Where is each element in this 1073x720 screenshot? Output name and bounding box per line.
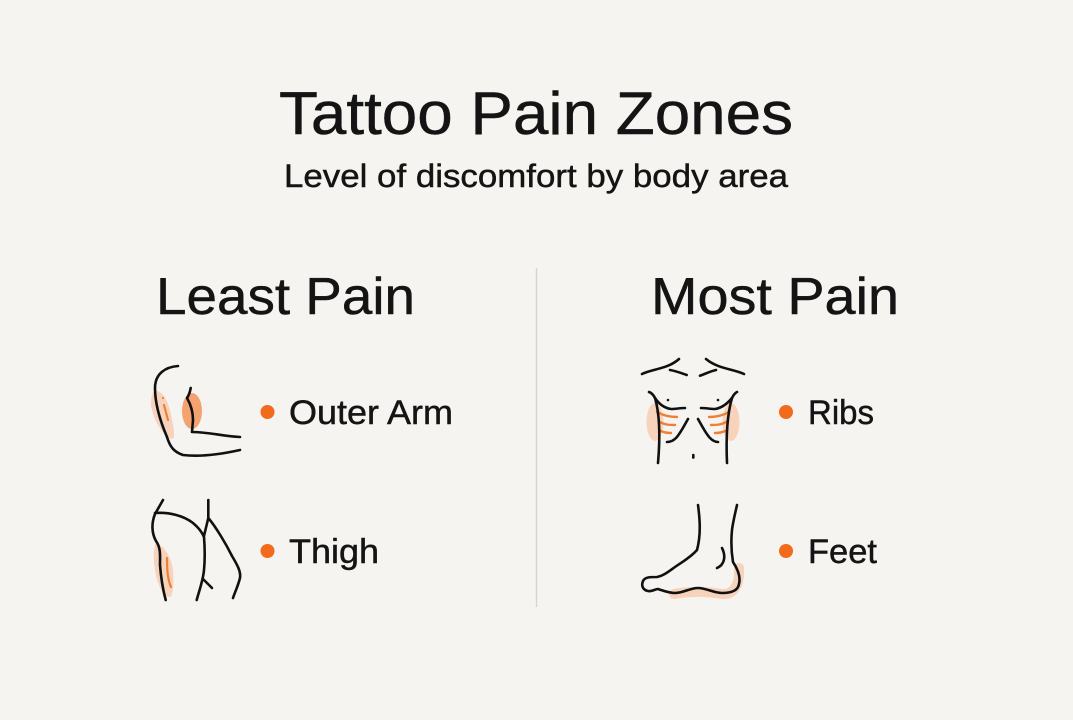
subtitle: Level of discomfort by body area bbox=[284, 158, 788, 194]
icon: feet bbox=[642, 505, 740, 594]
label: ribs: Ribs bbox=[808, 394, 874, 432]
bullet: ribs bbox=[779, 405, 793, 419]
label: outer arm: Outer Arm bbox=[289, 394, 453, 432]
heading: least pain: Least Pain bbox=[156, 268, 415, 326]
bullet: thigh bbox=[260, 544, 274, 558]
label: thigh: Thigh bbox=[289, 533, 379, 571]
icon: outer arm bbox=[151, 366, 240, 456]
icon: ribs bbox=[642, 359, 744, 463]
bullet: outer arm bbox=[260, 405, 274, 419]
bullet: feet bbox=[779, 544, 793, 558]
heading: most pain: Most Pain bbox=[651, 268, 899, 326]
title: Tattoo Pain Zones bbox=[279, 80, 793, 147]
label: feet: Feet bbox=[808, 533, 878, 571]
icon: thigh bbox=[152, 500, 240, 600]
